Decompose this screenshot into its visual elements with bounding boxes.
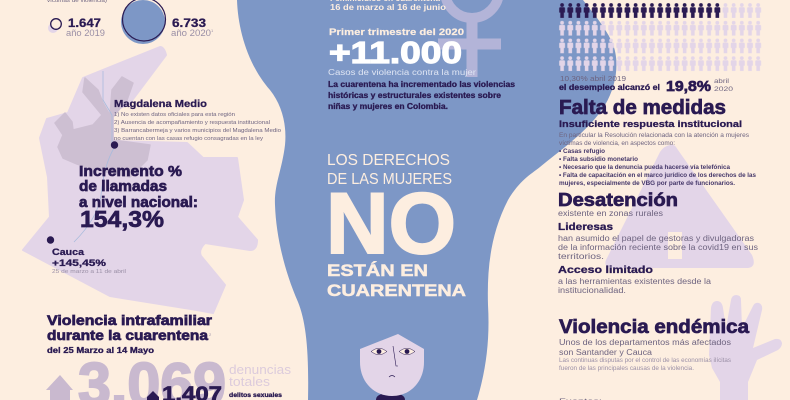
circle comparison 2019 vs 2020: 6.733 [172,18,206,30]
neglect, leaders, limited access: a las herramientas existentes desde la [558,277,712,286]
endemic violence: fueron de las principales causas de la violencia. [559,366,694,372]
center description: niñas y mujeres en Colombia. [328,102,448,111]
endemic violence [559,317,749,400]
circle comparison 2019 vs 2020: año 2019 [66,28,105,38]
national calls increase: a nivel nacional: [79,194,198,211]
national calls increase [79,163,198,232]
circle comparison 2019 vs 2020: 1 [211,28,214,33]
domestic violence heading [47,312,213,355]
neglect, leaders, limited access: existente en zonas rurales [558,209,663,218]
domestic violence heading: durante la cuarentena [47,327,208,343]
national calls increase: 154,3% [80,206,164,232]
endemic violence: Unos de los departamentos más afectados [559,338,731,347]
circle comparison 2019 vs 2020: año 2020 [171,28,211,38]
center top stats: Casos de violencia contra la mujer [328,68,476,77]
hand icon [709,295,782,400]
main slogan: DE LAS MUJERES [327,171,452,188]
main slogan: ESTÁN EN [327,261,428,280]
Cauca stat: 25 de marzo a 11 de abril [52,269,126,275]
main slogan: LOS DERECHOS [327,152,450,169]
Magdalena Medio text block: 3) Barrancabermeja y varios municipios del Magdalena Medio [114,128,281,134]
lack of measures: En particular la Resolución relacionada con la atención a mujeres [559,132,749,139]
Magdalena Medio text block: 1) No existen datos oficiales para esta región [114,112,235,118]
central blue shape [237,0,616,400]
center top stats: 16 de marzo al 16 de junio [330,3,446,12]
unemployment stat: 10,30% abril 2019 [560,74,626,83]
illustration: woman's face [360,334,424,400]
neglect, leaders, limited access: Acceso limitado [558,264,653,276]
endemic violence: son Santander y Cauca [559,348,653,357]
map of Colombia [23,47,257,313]
lack of measures: • Falta de capacitación en el marco jurídico de los derechos de las [559,172,757,179]
neglect, leaders, limited access: Desatención [558,190,678,210]
endemic violence: Las continuas disputas por el control de las economías ilícitas [559,358,731,364]
lack of measures: Falta de medidas [559,97,726,119]
main slogan: CUARENTENA [327,281,466,300]
Magdalena Medio text block: Magdalena Medio [114,98,207,110]
center top stats [328,0,476,77]
unemployment stat: el desempleo alcanzó el [559,83,660,92]
neglect, leaders, limited access: territorios. [558,252,604,261]
Cauca stat: +145,45% [52,258,107,269]
center description [328,80,516,111]
endemic violence: Violencia endémica [559,317,749,338]
circle comparison 2019 vs 2020 [47,0,214,44]
national calls increase: de llamadas [79,178,167,195]
domestic violence heading: Violencia intrafamiliar [47,312,213,328]
Magdalena Medio text block: no cuentan con las casas refugio consagradas en la ley [114,136,263,142]
unemployment stat: abril [714,78,730,85]
lack of measures: • Casas refugio [559,148,605,155]
domestic violence heading: del 25 Marzo al 14 Mayo [47,346,154,355]
domestic violence numbers: delitos sexuales [229,392,282,399]
main slogan: NO [326,176,456,272]
neglect, leaders, limited access: Lideresas [558,221,613,233]
lack of measures: • Necesario que la denuncia pueda hacerse vía telefónica [559,164,731,171]
domestic violence numbers: totales [229,374,271,389]
national calls increase: Incremento % [79,163,182,180]
pictogram: unemployment people [558,3,762,71]
neglect, leaders, limited access: han asumido el papel de gestoras y divulgadoras [558,234,754,243]
lack of measures [559,97,757,187]
warning triangle icon [605,145,754,268]
lack of measures: mujeres, especialmente de VBG por parte de funcionarios. [559,180,735,187]
main slogan [326,152,466,300]
Magdalena Medio text block: 2) Ausencia de acompañamiento y respuesta institucional [114,120,270,126]
neglect, leaders, limited access: de la información reciente sobre la covid19 en sus [558,243,758,252]
domestic violence numbers [46,351,292,400]
center description: La cuarentena ha incrementado las violencias [328,80,516,89]
center top stats: Primer trimestre del 2020 [329,27,464,38]
neglect, leaders, limited access [558,190,758,295]
Cauca stat: Cauca [52,247,85,258]
Cauca stat [52,247,126,275]
circle comparison 2019 vs 2020: 1.647 [68,18,101,30]
unemployment stat [559,74,733,95]
domestic violence heading: 2 [209,332,212,337]
unemployment stat: 19,8% [666,78,711,95]
neglect, leaders, limited access: institucionalidad. [558,286,626,295]
domestic violence numbers: denuncias [229,362,292,377]
lack of measures: • Falta subsidio monetario [559,156,638,163]
center description: históricas y estructurales existentes sobre [328,91,502,100]
lack of measures: Insuficiente respuesta institucional [559,119,742,130]
Magdalena Medio text block [114,98,281,142]
lack of measures: víctimas de violencia, en aspectos como: [559,140,675,147]
female symbol [438,0,501,77]
unemployment stat: 2020 [714,86,733,93]
center top stats: +11.000 [329,35,462,70]
